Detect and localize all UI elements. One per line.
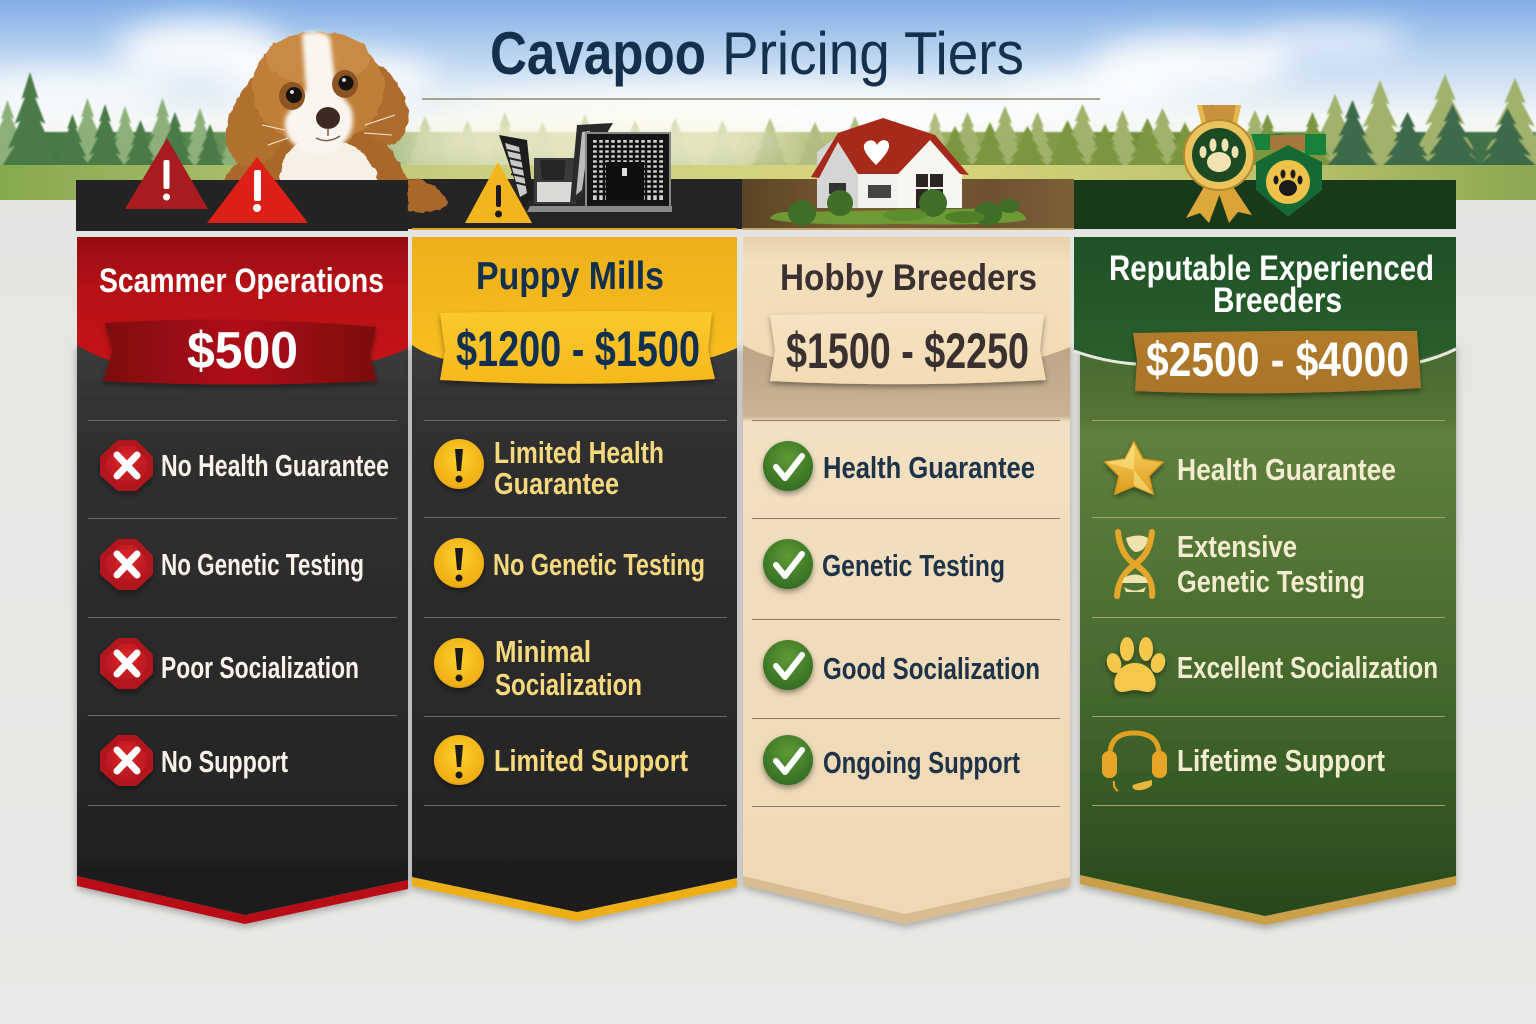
heading: scammer operations: Scammer Operations xyxy=(99,262,384,300)
list item: limited health guarantee: Guarantee xyxy=(494,466,619,501)
price ribbon: $2500 - $4000: $2500 - $4000 xyxy=(1146,334,1409,387)
top strip: column 1 xyxy=(76,180,408,231)
price ribbon: $500 xyxy=(103,320,377,384)
landscape header: sky, trees and grass xyxy=(0,0,1536,200)
list item: extensive genetic testing: Genetic Testing xyxy=(1177,564,1365,599)
top strip: column 3 xyxy=(742,179,1074,230)
list item: genetic testing xyxy=(763,539,1005,589)
price ribbon: $1500 - $2250 xyxy=(770,313,1046,384)
heading: puppy mills: Puppy Mills xyxy=(476,255,664,298)
list item: ongoing support xyxy=(763,735,1020,785)
list item: minimal socialization: Minimal xyxy=(495,634,591,669)
list item: no genetic testing: No Genetic Testing xyxy=(161,547,364,582)
list item: limited health guarantee xyxy=(434,435,664,501)
list item: good socialization xyxy=(763,640,1040,690)
panel body: reputable breeders xyxy=(1080,345,1456,925)
icon: wire cages and warning xyxy=(465,123,672,223)
list item: limited health guarantee: Limited Health xyxy=(494,435,664,470)
list item: poor socialization xyxy=(103,641,359,686)
list item: no support: No Support xyxy=(161,744,288,779)
list item: health guarantee xyxy=(763,441,1035,491)
puppy paw xyxy=(408,180,449,212)
list item: good socialization: Good Socialization xyxy=(823,651,1040,686)
panel body: puppy mills xyxy=(412,345,737,921)
top strip: column 4 xyxy=(1074,180,1456,229)
puppy illustration xyxy=(218,32,412,190)
list item: lifetime support xyxy=(1102,733,1385,791)
icon: house with heart xyxy=(770,118,1026,226)
heading: hobby breeders: Hobby Breeders xyxy=(780,257,1037,298)
heading: reputable experienced breeders: Reputable Experienced xyxy=(1109,249,1434,288)
heading: reputable experienced breeders xyxy=(1109,249,1434,320)
list item: genetic testing: Genetic Testing xyxy=(822,548,1005,583)
list item: poor socialization: Poor Socialization xyxy=(161,650,359,685)
panel header: puppy mills xyxy=(412,237,737,362)
panel header: hobby breeders xyxy=(743,237,1070,362)
list item: no genetic testing xyxy=(434,538,705,588)
list item: excellent socialization xyxy=(1105,637,1438,692)
list item: health guarantee xyxy=(1105,442,1396,494)
list item: no genetic testing xyxy=(103,542,364,587)
top strip: column 2 xyxy=(408,179,742,230)
panel body: hobby breeders xyxy=(743,345,1070,924)
list item: minimal socialization: Socialization xyxy=(495,667,642,702)
list item: no health guarantee: No Health Guarantee xyxy=(161,448,389,483)
list item: ongoing support: Ongoing Support xyxy=(823,745,1020,780)
list item: limited support xyxy=(434,735,688,785)
panel body: scammer xyxy=(77,345,408,924)
list item: extensive genetic testing xyxy=(1117,529,1365,599)
panel header: scammer xyxy=(77,237,408,365)
list item: excellent socialization: Excellent Socialization xyxy=(1177,650,1438,685)
icon: medal and shield xyxy=(1184,105,1326,223)
list item: health guarantee: Health Guarantee xyxy=(1177,452,1396,487)
title: Cavapoo xyxy=(490,20,706,87)
panel: scammer operations xyxy=(77,237,408,924)
list item: lifetime support: Lifetime Support xyxy=(1177,743,1385,778)
list item: minimal socialization xyxy=(434,634,642,702)
list item: limited support: Limited Support xyxy=(494,743,688,778)
panel: reputable experienced breeders xyxy=(1074,237,1456,925)
title xyxy=(490,20,1024,87)
list item: health guarantee: Health Guarantee xyxy=(823,450,1035,485)
price ribbon: $1200 - $1500: $1200 - $1500 xyxy=(456,321,700,377)
list item: no support xyxy=(103,738,288,783)
list item: extensive genetic testing: Extensive xyxy=(1177,529,1297,564)
list item: no health guarantee xyxy=(103,443,389,488)
title: Pricing Tiers xyxy=(722,20,1024,87)
icon: warning triangles xyxy=(125,138,308,223)
price ribbon: $1500 - $2250: $1500 - $2250 xyxy=(786,323,1029,379)
list item: no genetic testing: No Genetic Testing xyxy=(493,547,705,582)
heading: reputable experienced breeders: Breeders xyxy=(1213,281,1342,320)
panel: puppy mills xyxy=(412,237,737,921)
panel: hobby breeders xyxy=(743,237,1070,924)
price ribbon: $1200 - $1500 xyxy=(440,311,715,384)
panel header: reputable breeders xyxy=(1074,237,1456,364)
price ribbon: $500: $500 xyxy=(187,322,298,380)
